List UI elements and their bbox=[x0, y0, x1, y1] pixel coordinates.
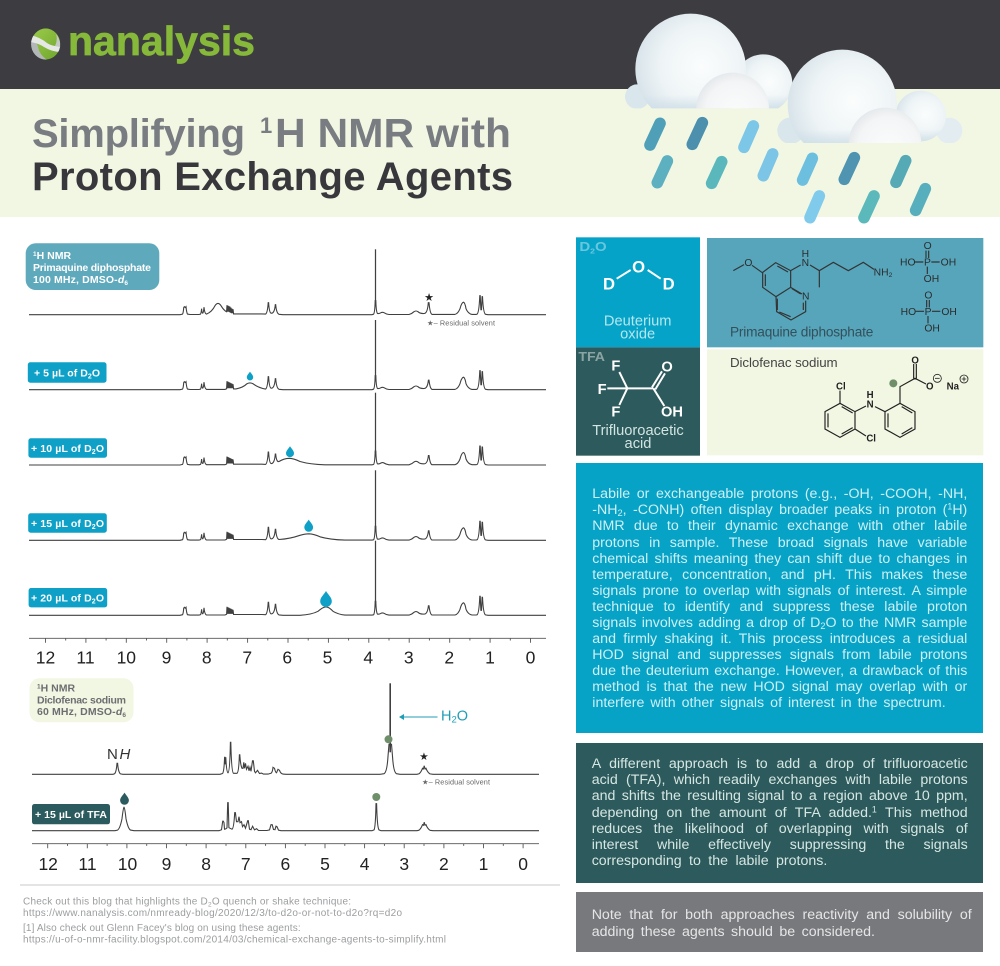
axis: primaquine ppm: 5 bbox=[323, 647, 332, 667]
text block: D2O approach: signals involves adding a drop of D2O to the NMR sample bbox=[592, 615, 967, 631]
structure: phosphate 1: OH bbox=[941, 258, 956, 269]
structure labels: NH bbox=[874, 267, 889, 278]
badge: 15 uL D2O bbox=[28, 513, 107, 533]
label: diclofenac spectrum info bbox=[30, 678, 134, 722]
note: residual solvent: ★– Residual solvent bbox=[427, 318, 495, 328]
footer references: 2 bbox=[208, 901, 212, 908]
structure: phosphate 2: OH bbox=[924, 323, 940, 334]
label: primaquine spectrum info: 1 bbox=[33, 251, 37, 258]
structure: phosphate 1: O bbox=[924, 241, 932, 252]
label: primaquine spectrum info: 6 bbox=[124, 280, 128, 287]
title line 1: H NMR with bbox=[275, 110, 511, 156]
text block: note: adding these agents should be considered. bbox=[592, 924, 875, 940]
text block: D2O approach: interfere with other signals of interest in the spectrum. bbox=[592, 695, 946, 711]
icon: star, residual solvent: ★ bbox=[419, 751, 429, 763]
icon: droplet 20 uL bbox=[320, 591, 332, 607]
structure labels: H bbox=[867, 390, 874, 401]
axis: diclofenac ppm: 5 bbox=[320, 854, 330, 874]
card label: Diclofenac sodium: Diclofenac sodium bbox=[730, 355, 838, 370]
structure: D2O: O bbox=[632, 257, 645, 276]
label: diclofenac spectrum info: H NMR bbox=[41, 683, 75, 695]
footer references: https://u-of-o-nmr-facility.blogspot.com/2014/03/chemical-exchange-agents-to-simplify.html bbox=[23, 934, 446, 945]
badge: 10 uL D2O: O bbox=[96, 443, 104, 455]
structure: D2O: D bbox=[663, 274, 675, 293]
axis: diclofenac ppm: 10 bbox=[118, 854, 137, 874]
label: H2O: 2 bbox=[451, 714, 457, 726]
structure: TFA: F bbox=[611, 404, 620, 420]
icon: star, residual solvent: ★ bbox=[424, 291, 434, 304]
spectrum: plus 10 uL D2O bbox=[29, 393, 546, 465]
structure labels: N bbox=[867, 400, 874, 411]
panel: primaquine NMR series bbox=[26, 243, 546, 667]
card: deuterium oxide bbox=[576, 237, 700, 347]
footer references: Check out this blog that highlights the D bbox=[23, 896, 208, 907]
icon: TFA droplet bbox=[120, 793, 129, 805]
structure: TFA: OH bbox=[661, 405, 683, 421]
badge: 10 uL D2O: 2 bbox=[92, 449, 96, 456]
text block: TFA approach: interest while effectively suppressing the signals bbox=[592, 837, 968, 853]
badge: 10 uL D2O bbox=[28, 438, 107, 458]
badge: 5 uL D2O: + 5 µL of D bbox=[34, 367, 88, 379]
axis: diclofenac ppm: 8 bbox=[201, 854, 211, 874]
header bar bbox=[0, 0, 1000, 89]
badge: 20 uL D2O bbox=[29, 588, 107, 607]
marker: green dot on CH2 bbox=[889, 379, 897, 387]
text block: D2O approach: NMR due to their dynamic exchange with other labile bbox=[592, 518, 967, 534]
label: diclofenac spectrum info: Diclofenac sodium bbox=[37, 694, 126, 706]
rain drops bbox=[650, 123, 925, 218]
structure: phosphate 2: OH bbox=[941, 307, 957, 318]
axis: primaquine ppm: 1 bbox=[485, 647, 495, 667]
structure: D2O bbox=[603, 257, 675, 293]
text block: D2O approach: and firmly shaking it. This process introduces a residual bbox=[592, 631, 967, 647]
icon: logo sphere bbox=[30, 28, 61, 60]
text block: D2O approach: method is that the new HOD signal may overlap with or bbox=[592, 679, 967, 695]
label: NH bbox=[107, 746, 130, 763]
card heading: D2O: O bbox=[595, 240, 607, 254]
text block: TFA approach: depending on the amount of TFA added.1 This method bbox=[592, 804, 968, 821]
logo wordmark: nanalysis bbox=[68, 18, 255, 64]
footer references bbox=[23, 896, 446, 945]
card heading: TFA: TFA bbox=[578, 350, 605, 364]
axis: primaquine ppm: 4 bbox=[363, 647, 373, 667]
axis: primaquine ppm: 7 bbox=[242, 647, 252, 667]
text block: D2O approach: due the deuterium exchange. However, a drawback of this bbox=[592, 663, 967, 679]
structure: phosphate 2: P bbox=[925, 307, 932, 318]
spectrum: diclofenac reference bbox=[32, 683, 539, 774]
axis: primaquine ppm: 10 bbox=[117, 647, 136, 667]
label: H2O: O bbox=[457, 708, 468, 724]
axis: primaquine ppm: 8 bbox=[202, 647, 212, 667]
text block: D2O approach: -NH2, -CONH) often display broader peaks in proton (1H) bbox=[592, 502, 967, 518]
spectrum: primaquine reference bbox=[29, 249, 546, 315]
card label: Trifluoroacetic acid bbox=[592, 423, 684, 452]
card label: Deuterium oxide bbox=[604, 314, 671, 343]
card label: Primaquine diphosphate: Primaquine diphosphate bbox=[730, 325, 873, 340]
title bbox=[32, 110, 513, 199]
badge: 20 uL D2O: + 20 µL of D bbox=[31, 592, 92, 604]
text block: TFA approach: and shifts the resulting signal to a region above 10 ppm, bbox=[592, 788, 968, 804]
text block: D2O approach: Labile or exchangeable protons (e.g., -OH, -COOH, -NH, bbox=[592, 486, 967, 502]
text block: D2O approach: technique to identify and suppress these labile proton bbox=[592, 599, 967, 615]
axis: primaquine ppm: 12 bbox=[36, 647, 55, 667]
structure: phosphate 1 bbox=[900, 241, 956, 285]
card label: Deuterium oxide: oxide bbox=[620, 327, 655, 343]
spectrum: plus 15 uL D2O bbox=[29, 470, 546, 540]
card label: Deuterium oxide: Deuterium bbox=[604, 314, 671, 330]
axis: diclofenac ppm: 9 bbox=[162, 854, 171, 874]
marker: green dot on CH2 bbox=[384, 735, 392, 743]
structure labels: Na bbox=[947, 382, 960, 393]
structure: TFA: O bbox=[661, 359, 673, 375]
text block: note: Note that for both approaches reactivity and solubility of bbox=[592, 907, 972, 923]
axis: primaquine ppm: 0 bbox=[526, 647, 536, 667]
axis: diclofenac ppm: 0 bbox=[518, 854, 528, 874]
structure labels bbox=[744, 249, 893, 302]
icon: droplet 5 uL bbox=[247, 372, 253, 380]
label: H2O: H bbox=[441, 708, 451, 724]
label: NH: H bbox=[120, 746, 130, 763]
badge: 20 uL D2O: 2 bbox=[92, 598, 96, 606]
card heading: D2O: 2 bbox=[590, 247, 595, 256]
structure: phosphate 2: O bbox=[924, 290, 932, 301]
structure: TFA: F bbox=[598, 382, 607, 398]
spectrum: plus 5 uL D2O bbox=[29, 320, 546, 390]
title line 1: 1 bbox=[260, 113, 272, 138]
axis: diclofenac ppm: 7 bbox=[241, 854, 251, 874]
illustration: rain clouds bbox=[625, 14, 962, 218]
badge: 5 uL D2O bbox=[28, 362, 106, 383]
label: NH: N bbox=[107, 746, 118, 763]
label: primaquine spectrum info: 100 MHz, DMSO-d bbox=[33, 274, 124, 286]
cloud 1 bbox=[625, 14, 792, 108]
axis: diclofenac ppm: 3 bbox=[399, 854, 409, 874]
structure: phosphate 2: HO bbox=[901, 307, 916, 318]
label: diclofenac spectrum info: 1 bbox=[37, 684, 41, 691]
badge: 10 uL D2O: + 10 µL of D bbox=[31, 443, 92, 455]
cloud 2 bbox=[777, 50, 962, 143]
title line 1: Simplifying bbox=[32, 112, 245, 156]
structure labels bbox=[836, 355, 960, 444]
card: diclofenac sodium bbox=[707, 349, 983, 455]
text block: D2O approach: chemical shifts meaning they can shift due to changes in bbox=[592, 551, 967, 567]
note: residual solvent: ★– Residual solvent bbox=[422, 778, 490, 786]
title band bbox=[0, 89, 1000, 217]
label: diclofenac spectrum info: 60 MHz, DMSO-d bbox=[37, 706, 122, 718]
text block: D2O approach bbox=[592, 486, 967, 711]
text block: D2O approach: protons in sample. These broad signals have variable bbox=[592, 535, 967, 551]
axis: diclofenac ppm: 1 bbox=[479, 854, 488, 874]
structure labels: 2 bbox=[889, 272, 893, 279]
title line 1 bbox=[32, 110, 511, 156]
structure labels: O bbox=[911, 355, 919, 366]
text block: D2O approach: HOD signal and suppresses signals from labile protons bbox=[592, 647, 967, 663]
text block: TFA approach bbox=[592, 756, 968, 869]
structure: D2O: D bbox=[603, 274, 615, 293]
logo: Nanalysis bbox=[31, 25, 254, 64]
structure labels: Cl bbox=[836, 381, 846, 392]
axis: diclofenac ppm: 11 bbox=[78, 854, 97, 874]
axis: primaquine ppm: 9 bbox=[162, 647, 171, 667]
structure: phosphate 1: P bbox=[924, 258, 931, 269]
card label: Trifluoroacetic acid: acid bbox=[625, 436, 651, 452]
text block: D2O approach: signals prone to overlap with signals of interest. A simple bbox=[592, 583, 967, 599]
badge: 5 uL D2O: 2 bbox=[88, 373, 92, 380]
structure: phosphate 1: OH bbox=[924, 274, 939, 285]
axis: primaquine ppm: 3 bbox=[404, 647, 414, 667]
panel: D2O explanation bbox=[576, 463, 983, 733]
badge: 15 uL D2O: O bbox=[96, 518, 104, 530]
card: primaquine diphosphate bbox=[707, 238, 983, 347]
card heading: D2O: D bbox=[579, 240, 588, 254]
panel: diclofenac NMR series bbox=[30, 678, 539, 874]
panel: note bbox=[576, 892, 983, 952]
card label: Trifluoroacetic acid: Trifluoroacetic bbox=[592, 423, 684, 439]
axis: diclofenac ppm: 2 bbox=[439, 854, 449, 874]
label: diclofenac spectrum info: 6 bbox=[122, 712, 126, 719]
structure: phosphate 1: HO bbox=[900, 258, 915, 269]
icon: droplet 10 uL bbox=[286, 446, 294, 457]
structure: primaquine bbox=[733, 249, 893, 320]
structure labels: H bbox=[802, 249, 809, 260]
card: trifluoroacetic acid bbox=[576, 347, 700, 456]
text block: note bbox=[592, 907, 972, 940]
axis: diclofenac ppm: 4 bbox=[360, 854, 370, 874]
arrow: H2O pointer bbox=[399, 708, 468, 726]
structure: phosphate 2 bbox=[901, 290, 957, 334]
text block: TFA approach: reduces the likelihood of overlapping with signals of bbox=[592, 821, 968, 837]
badge: 15 uL TFA bbox=[32, 804, 110, 824]
structure labels: Cl bbox=[866, 433, 876, 444]
marker: shifted green dot bbox=[372, 793, 380, 801]
axis: primaquine ppm: 11 bbox=[76, 647, 95, 667]
axis: diclofenac ppm: 12 bbox=[38, 854, 58, 874]
structure labels: N bbox=[802, 291, 809, 302]
label: primaquine spectrum info: Primaquine diphosphate bbox=[33, 262, 151, 274]
text block: TFA approach: A different approach is to add a drop of trifluoroacetic bbox=[592, 756, 968, 772]
axis: primaquine ppm bbox=[29, 638, 546, 667]
footer references: [1] Also check out Glenn Facey's blog on using these agents: bbox=[23, 923, 301, 934]
badge: 5 uL D2O: O bbox=[92, 367, 100, 379]
structure: TFA bbox=[598, 359, 683, 421]
text block: D2O approach: temperature, concentration, and pH. This makes these bbox=[592, 567, 967, 583]
footer references: https://www.nanalysis.com/nmready-blog/2020/12/3/to-d2o-or-not-to-d2o?rq=d2o bbox=[23, 908, 402, 919]
spectrum: plus 20 uL D2O bbox=[29, 541, 546, 615]
badge: 15 uL D2O: 2 bbox=[92, 524, 96, 531]
text block: TFA approach: acid (TFA), which readily exchanges with labile protons bbox=[592, 772, 968, 788]
badge: 15 uL TFA: + 15 µL of TFA bbox=[35, 809, 107, 821]
structure labels: O bbox=[926, 382, 934, 393]
axis: primaquine ppm: 6 bbox=[282, 647, 292, 667]
label: primaquine spectrum info bbox=[26, 243, 159, 290]
structure labels: N bbox=[802, 258, 809, 269]
axis: primaquine ppm: 2 bbox=[444, 647, 454, 667]
structure labels: O bbox=[744, 258, 752, 269]
spectrum: plus 15 uL TFA bbox=[32, 803, 539, 831]
title line 2: Proton Exchange Agents bbox=[32, 155, 513, 199]
structure: diclofenac bbox=[825, 355, 968, 444]
structure: TFA: F bbox=[611, 359, 620, 375]
badge: 20 uL D2O: O bbox=[96, 592, 104, 604]
axis: diclofenac ppm: 6 bbox=[281, 854, 290, 874]
badge: 15 uL D2O: + 15 µL of D bbox=[31, 518, 92, 530]
label: primaquine spectrum info: H NMR bbox=[37, 250, 71, 262]
text block: TFA approach: corresponding to the labile protons. bbox=[592, 853, 827, 869]
axis: diclofenac ppm bbox=[32, 844, 539, 874]
footer references: O quench or shake technique: bbox=[212, 896, 351, 907]
panel: structures bbox=[576, 237, 983, 456]
icon: droplet 15 uL bbox=[304, 520, 313, 532]
panel: TFA explanation bbox=[576, 743, 983, 883]
